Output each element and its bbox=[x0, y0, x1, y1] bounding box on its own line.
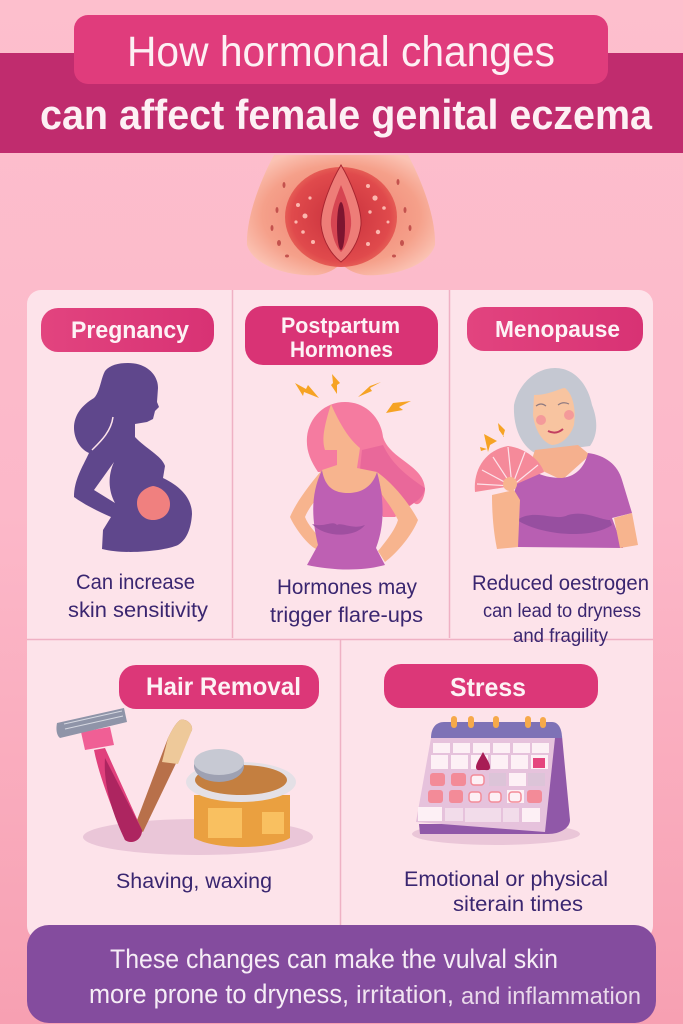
panel: hair removal bbox=[56, 665, 319, 893]
pill: postpartum heading: Postpartum bbox=[281, 313, 400, 338]
pill: postpartum heading bbox=[245, 306, 438, 365]
icon: pregnant silhouette bbox=[74, 363, 192, 552]
caption: postpartum: Hormones may bbox=[277, 576, 417, 599]
pill: postpartum heading: Hormones bbox=[290, 337, 393, 362]
caption: postpartum: trigger flare-ups bbox=[270, 604, 423, 627]
panel: menopause bbox=[467, 307, 649, 647]
caption: pregnancy: skin sensitivity bbox=[68, 599, 209, 622]
pill: hair removal heading: Hair Removal bbox=[146, 673, 301, 701]
caption: postpartum bbox=[270, 576, 423, 627]
pill: stress heading bbox=[384, 664, 598, 708]
callout: bottom summary: irritation, bbox=[356, 981, 454, 1009]
icon: razor, spatula and wax jar bbox=[56, 708, 313, 855]
pill: hair removal heading bbox=[119, 665, 319, 709]
panel: postpartum hormones bbox=[245, 306, 438, 627]
title line 1: How hormonal changes bbox=[127, 28, 555, 76]
callout: bottom summary: more prone to dryness, bbox=[89, 979, 349, 1009]
icon: calendar bbox=[412, 716, 580, 845]
panel: stress bbox=[384, 664, 608, 916]
icon: older woman with fan bbox=[475, 368, 638, 549]
pill: menopause heading bbox=[467, 307, 643, 351]
callout: bottom summary: These changes can make the vulval skin bbox=[110, 944, 558, 974]
caption: pregnancy: Can increase bbox=[76, 571, 195, 594]
title line 2: can affect female genital eczema bbox=[40, 91, 653, 138]
pill: stress heading: Stress bbox=[450, 672, 526, 702]
pill: pregnancy heading: Pregnancy bbox=[71, 317, 190, 344]
header: title banner bbox=[0, 15, 683, 153]
caption: stress: Emotional or physical bbox=[404, 868, 608, 891]
pill: pregnancy heading bbox=[41, 308, 214, 352]
caption: menopause: Reduced oestrogen bbox=[472, 572, 649, 595]
icon: woman with pink hair bbox=[290, 402, 425, 570]
caption: menopause bbox=[472, 572, 649, 647]
callout: bottom summary: and inflammation bbox=[461, 983, 641, 1010]
pill: menopause heading: Menopause bbox=[495, 316, 620, 342]
caption: hair removal: Shaving, waxing bbox=[116, 870, 272, 893]
caption: menopause: can lead to dryness bbox=[483, 601, 641, 622]
icon: lightning bolts bbox=[295, 374, 411, 413]
panel: factors card bbox=[27, 290, 653, 940]
caption: menopause: and fragility bbox=[513, 626, 608, 647]
caption: stress: siterain times bbox=[453, 893, 583, 916]
caption: stress bbox=[404, 868, 608, 916]
icon: clinical illustration of inflamed vulval skin bbox=[247, 155, 435, 275]
caption: pregnancy bbox=[68, 571, 209, 622]
callout: bottom summary bbox=[27, 925, 656, 1023]
panel: pregnancy bbox=[41, 308, 214, 622]
